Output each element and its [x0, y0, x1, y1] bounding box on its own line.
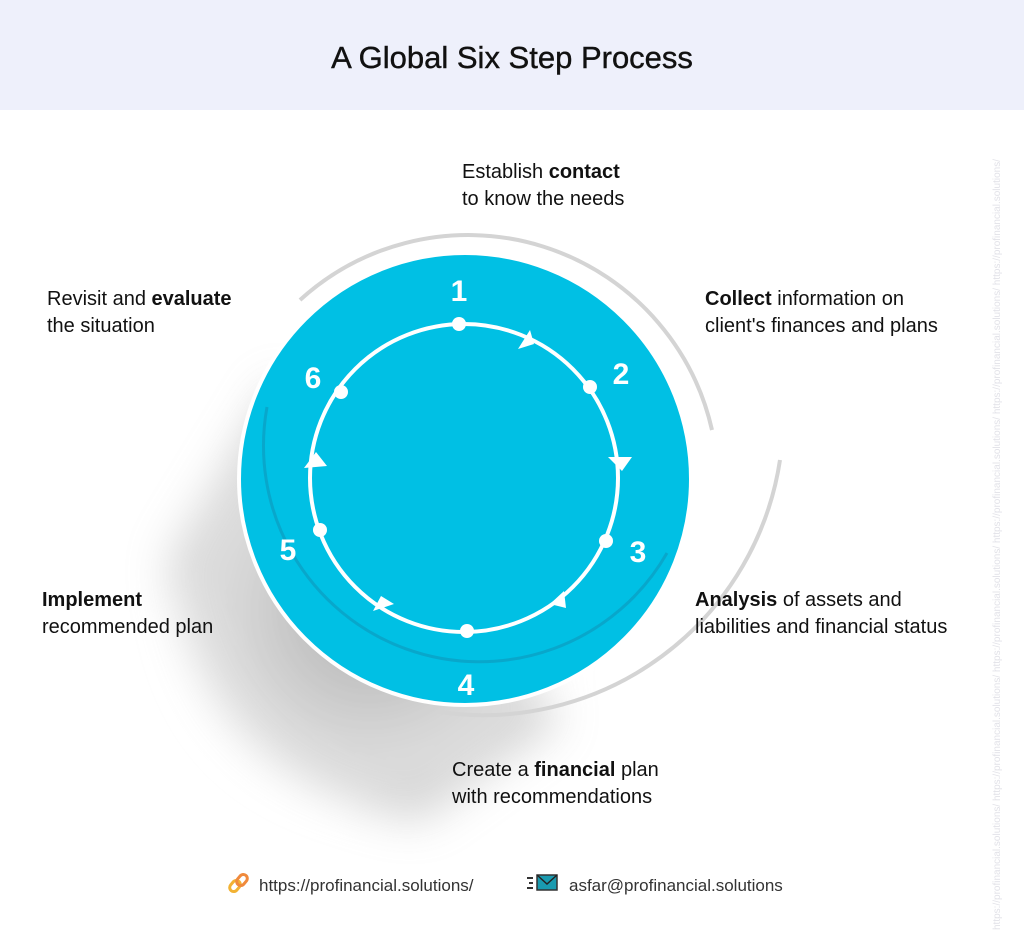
- grey spiral arc: [300, 235, 780, 715]
- step numbers: [280, 275, 646, 702]
- step 5 text: Implement: [42, 589, 142, 611]
- watermark: https://profinancial.solutions/ https://profinancial.solutions/ https://profinancial.solutions/ https://profinancial.solutions/ https://profinancial.solutions/ https://profinancial.solutions/: [992, 159, 1003, 930]
- step 1 text: to know the needs: [462, 188, 624, 210]
- step 1 text: Establish contact: [462, 161, 620, 183]
- step numbers: 6: [305, 362, 321, 395]
- footer: [228, 873, 783, 895]
- step 6 text: the situation: [47, 315, 155, 337]
- step texts: [42, 161, 947, 808]
- header band: [0, 0, 1024, 110]
- step 4 text: Create a financial plan: [452, 759, 659, 781]
- step 2 text: client's finances and plans: [705, 315, 938, 337]
- icon: mail: [527, 875, 557, 890]
- title: A Global Six Step Process: [331, 40, 693, 75]
- step numbers: 5: [280, 534, 296, 567]
- cycle ring: [304, 317, 632, 638]
- arrows: [304, 330, 632, 611]
- step 3 text: liabilities and financial status: [695, 616, 947, 638]
- shadow: [170, 380, 570, 820]
- step 6 text: Revisit and evaluate: [47, 288, 232, 310]
- step 2 text: Collect information on: [705, 288, 904, 310]
- step numbers: 2: [613, 358, 629, 391]
- step 4 text: with recommendations: [451, 786, 652, 808]
- step numbers: 3: [630, 536, 646, 569]
- step numbers: 1: [451, 275, 467, 308]
- dots: [313, 317, 613, 638]
- footer: asfar@profinancial.solutions: [569, 876, 783, 895]
- step 5 text: recommended plan: [42, 616, 213, 638]
- icon: link: [228, 873, 249, 893]
- step numbers: 4: [458, 669, 475, 702]
- blue disc: [239, 253, 691, 705]
- step 3 text: Analysis of assets and: [695, 589, 902, 611]
- footer: https://profinancial.solutions/: [259, 876, 474, 895]
